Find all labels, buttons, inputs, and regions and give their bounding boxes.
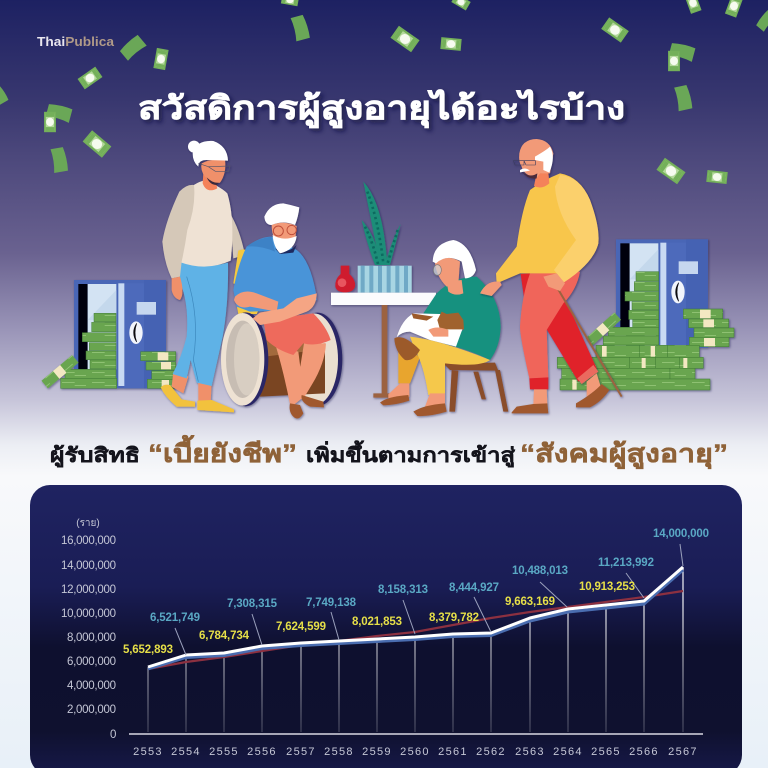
x axis years bbox=[133, 746, 698, 758]
x axis years: 2564 bbox=[553, 746, 583, 758]
y axis unit: (ราย) bbox=[76, 518, 100, 529]
y axis labels: 2,000,000 bbox=[67, 704, 116, 716]
icon: plant bbox=[362, 182, 401, 265]
subtitle: “เบี้ยยังชีพ” bbox=[148, 434, 297, 468]
illustration: right safe with money bbox=[557, 239, 734, 390]
panel: line chart bbox=[30, 485, 742, 768]
leader lines bbox=[175, 544, 683, 655]
figure: seated old woman with cat bbox=[380, 240, 508, 416]
y axis labels: 6,000,000 bbox=[67, 656, 116, 668]
title: สวัสดิการผู้สูงอายุได้อะไรบ้าง bbox=[138, 89, 625, 129]
cyan value labels: 10,488,013 bbox=[512, 565, 568, 577]
cyan value labels: 14,000,000 bbox=[653, 528, 709, 540]
illustration: table with vase and plant bbox=[331, 182, 436, 398]
x axis years: 2553 bbox=[133, 746, 163, 758]
yellow value labels: 5,652,893 bbox=[123, 644, 173, 656]
figure: standing old man with cane bbox=[480, 139, 622, 413]
y axis labels: 12,000,000 bbox=[61, 584, 116, 596]
y axis labels: 10,000,000 bbox=[61, 608, 116, 620]
y axis labels: 14,000,000 bbox=[61, 560, 116, 572]
x axis years: 2566 bbox=[629, 746, 659, 758]
y axis labels: 8,000,000 bbox=[67, 632, 116, 644]
y axis labels bbox=[61, 535, 116, 741]
yellow value labels: 6,784,734 bbox=[199, 630, 250, 642]
cyan value labels: 11,213,992 bbox=[598, 557, 654, 569]
figure: standing old woman bbox=[161, 141, 245, 412]
icon: cat bbox=[394, 312, 464, 360]
subtitle: ผู้รับสิทธิ bbox=[50, 444, 140, 469]
icon: red vase bbox=[335, 266, 355, 292]
y axis labels: 0 bbox=[110, 729, 116, 741]
cyan value labels: 8,444,927 bbox=[449, 582, 499, 594]
cyan value labels bbox=[150, 528, 709, 624]
subtitle: เพิ่มขึ้นตามการเข้าสู่ bbox=[306, 440, 516, 469]
blue shadow line bbox=[148, 570, 683, 669]
yellow value labels: 10,913,253 bbox=[579, 581, 635, 593]
x axis line bbox=[129, 733, 703, 735]
x axis years: 2563 bbox=[515, 746, 545, 758]
vertical drop lines bbox=[148, 567, 683, 732]
white data line bbox=[148, 567, 683, 667]
x axis years: 2565 bbox=[591, 746, 621, 758]
yellow value labels: 8,379,782 bbox=[429, 612, 479, 624]
yellow value labels: 7,624,599 bbox=[276, 621, 326, 633]
x axis years: 2560 bbox=[400, 746, 430, 758]
cyan value labels: 7,749,138 bbox=[306, 597, 357, 609]
x axis years: 2562 bbox=[476, 746, 506, 758]
yellow value labels: 8,021,853 bbox=[352, 616, 402, 628]
yellow value labels bbox=[123, 581, 635, 656]
red trend line bbox=[148, 591, 683, 669]
x axis years: 2559 bbox=[362, 746, 392, 758]
subtitle bbox=[50, 434, 728, 470]
x axis years: 2567 bbox=[668, 746, 698, 758]
x axis years: 2555 bbox=[209, 746, 239, 758]
x axis years: 2558 bbox=[324, 746, 354, 758]
yellow value labels: 9,663,169 bbox=[505, 596, 555, 608]
x axis years: 2556 bbox=[247, 746, 277, 758]
icon: striped pot bbox=[358, 266, 412, 293]
x axis years: 2557 bbox=[286, 746, 316, 758]
y axis labels: 4,000,000 bbox=[67, 680, 116, 692]
cyan value labels: 7,308,315 bbox=[227, 598, 278, 610]
x axis years: 2561 bbox=[438, 746, 468, 758]
logo: ThaiPublica: ThaiPublica bbox=[37, 35, 115, 49]
falling money bills bbox=[0, 0, 768, 184]
cyan value labels: 6,521,749 bbox=[150, 612, 200, 624]
figure: old man in wheelchair bbox=[221, 203, 342, 419]
illustration: left safe with money bbox=[41, 280, 176, 388]
subtitle: “สังคมผู้สูงอายุ” bbox=[520, 440, 728, 470]
cyan value labels: 8,158,313 bbox=[378, 584, 428, 596]
x axis years: 2554 bbox=[171, 746, 201, 758]
y axis labels: 16,000,000 bbox=[61, 535, 116, 547]
